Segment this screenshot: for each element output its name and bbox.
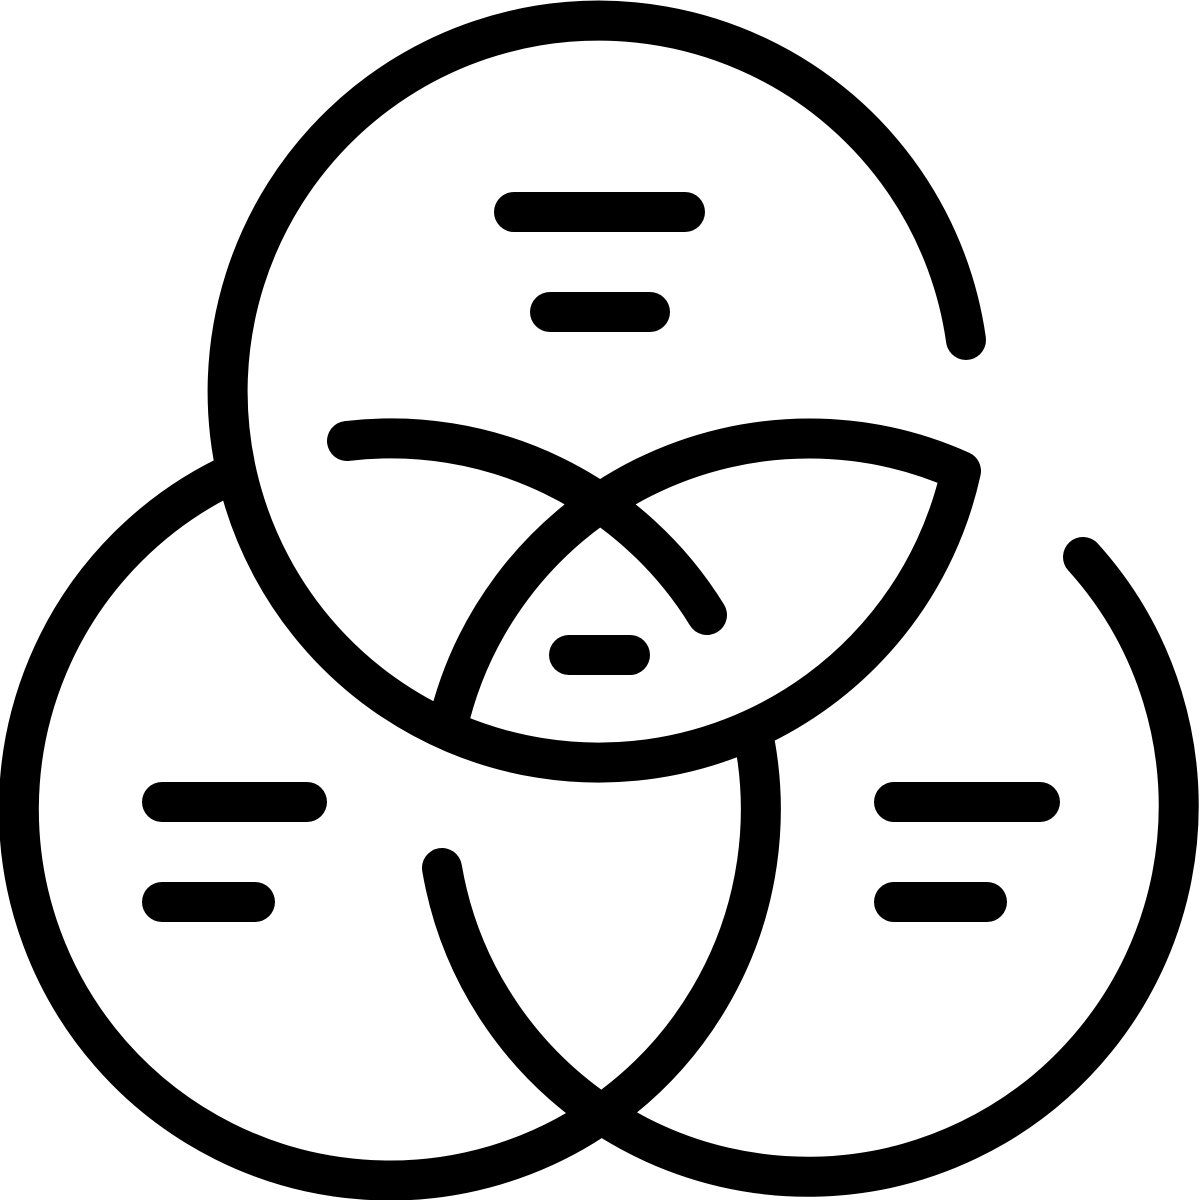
circle: right <box>442 557 1179 1177</box>
text line: center <box>569 635 630 675</box>
text lines: top <box>514 212 685 312</box>
text lines: right <box>894 802 1040 902</box>
circle: top with right lens <box>228 21 986 763</box>
circle: left <box>19 438 761 1181</box>
text lines: left <box>162 802 307 902</box>
